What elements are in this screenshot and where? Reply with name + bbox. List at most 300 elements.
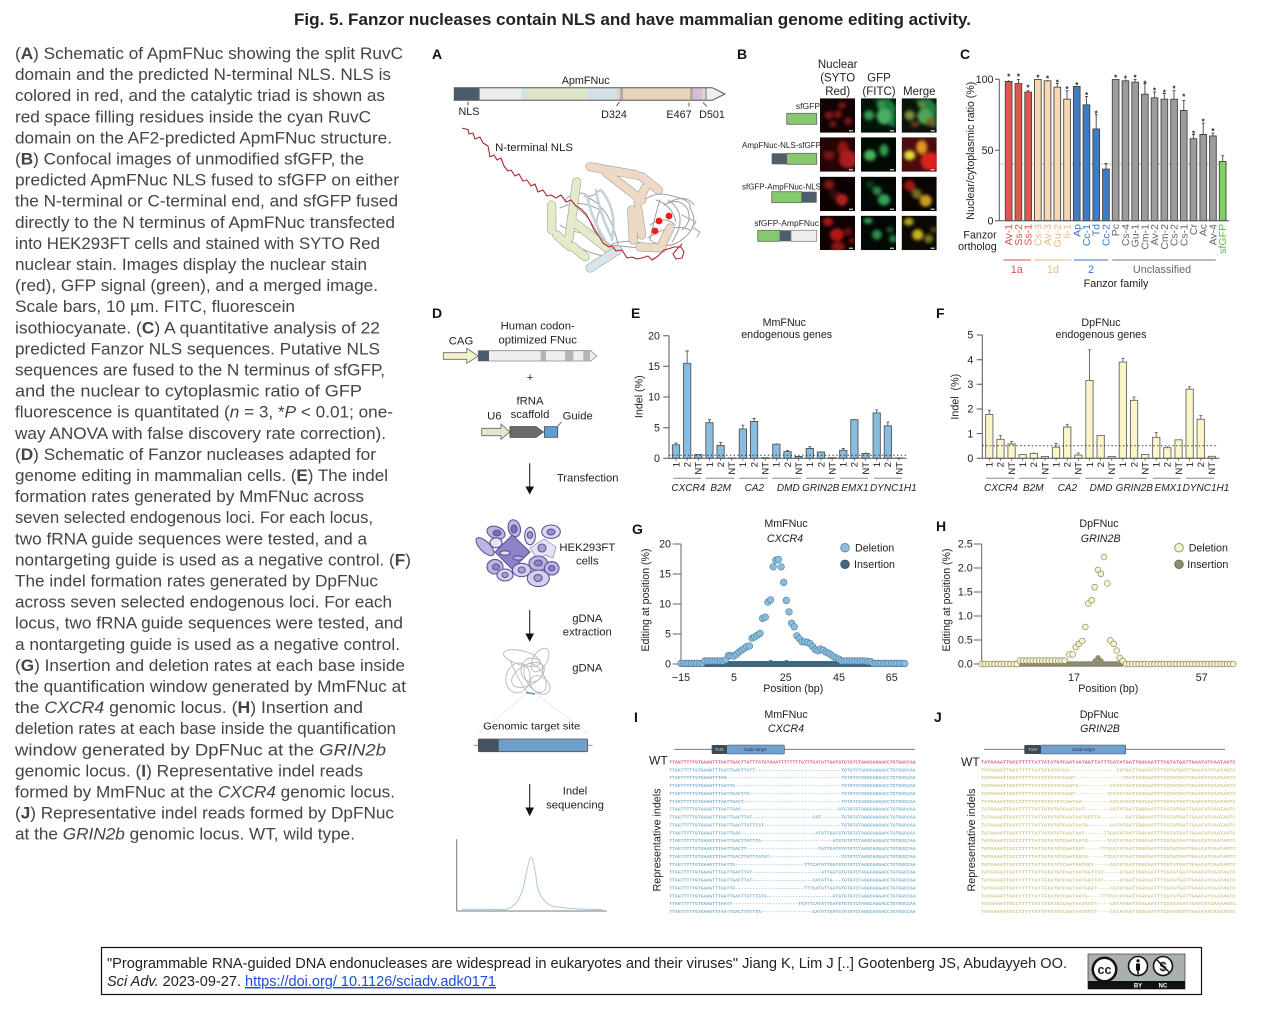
construct labels: + xyxy=(527,372,534,384)
domain bar labels: D501 xyxy=(699,109,725,121)
sequence alignment: TTAGTTTTTGTGAAGTTTAATTGACTTATTTA-------------------------ATGTGTGTCTAGGCAGGACCTGTGGCCAA xyxy=(669,838,916,844)
sequence alignment: TATGAAATTGCCTTTTTATTATATGTCAATAATG----TTTCATATGATTGGCAATTTCGTATGATTGAATATCAATAGTC xyxy=(981,893,1236,899)
axis row heading xyxy=(958,230,997,253)
label: HEK293FT cells: HEK293FT xyxy=(559,542,615,554)
sequence alignment: TATGAAATTGCCTTTTTATTATATGTCAATAATGGTT----CATATGATTGGCAATTTCGTATGATTGAATATCAATAGTC xyxy=(981,901,1236,907)
gene group lines xyxy=(986,477,1214,479)
text block: figure caption: locus, two fRNA guide sequences were tested, and xyxy=(15,614,403,633)
y tick labels xyxy=(967,330,973,465)
zoom lines xyxy=(478,693,588,733)
ortholog labels: Ss-2 xyxy=(1013,224,1025,246)
text block: figure caption: the CXCR4 genomic locus. ( H) Insertion and xyxy=(15,698,363,717)
threshold dotted line xyxy=(669,454,907,456)
axes xyxy=(977,335,1219,458)
text block: figure caption: domain and the predicted N-terminal NLS. NLS is xyxy=(15,65,391,84)
x tick labels: Position (bp) xyxy=(763,683,823,695)
arrow: transfection xyxy=(526,463,533,494)
sequence alignment: TTAGTTTTTGTGAAGTTTAATTGACTT-------------------------TATTGATGTGTGTCTAGGCAGGACCTGTGGCCAA xyxy=(669,846,916,852)
sequence alignment: TATGAAATTGCCTTTTTATTATATGTCAATAAT------TTCATATGATTGGCAATTTCGTATGATTGAATATCAATAGTC xyxy=(981,830,1236,836)
text block: figure caption: genome editing in mammalian cells. (E) The indel xyxy=(15,466,388,485)
insertion series xyxy=(681,663,905,664)
y tick labels: 1.0 xyxy=(958,611,973,623)
text block: figure caption: nuclear stain. Images display the nuclear stain xyxy=(15,255,367,274)
x tick labels: 5 xyxy=(731,672,737,684)
construct labels: CAG xyxy=(449,336,473,348)
chart title F: endogenous genes xyxy=(1056,329,1146,341)
citation reference: Sci Adv. 2023-09-27. xyxy=(107,974,241,990)
citation link: https://doi.org/ 10.1126/sciadv.adk0171 xyxy=(245,974,496,990)
chart title H: DpFNuc xyxy=(1079,518,1119,530)
locus diagram: Guide target xyxy=(743,747,767,752)
sequence alignment: TATGAAATTGCCTTTTTATTATATGTCAATAATGGTTATTTCATATGATTGGCAATTTCGTATGATTGAATATCAATAGTC xyxy=(981,759,1236,765)
gene labels: DYNC1H1 xyxy=(870,483,917,494)
y tick labels: 50 xyxy=(982,145,994,157)
text block: figure caption: way ANOVA with false discovery rate correction). xyxy=(14,424,386,443)
icon: CC BY NC badge xyxy=(1088,954,1185,990)
text block: figure caption: (G) Insertion and deletion rates at each base inside xyxy=(15,656,405,675)
ortholog labels: Cs-2 xyxy=(1168,224,1180,246)
protein structure illustration xyxy=(463,128,700,268)
WT label: WT xyxy=(961,755,980,769)
sequence alignment: TTAGTTTTTGTGAAGTTTAATTGACTTAT---------------------CAT-------TGTGTCTAGGCAGGACCTGTGGCCAA xyxy=(669,815,916,821)
chart title J: DpFNuc xyxy=(1080,709,1120,721)
gene labels: CA2 xyxy=(745,483,764,494)
ortholog labels: Av-2 xyxy=(1149,224,1161,245)
y tick labels xyxy=(659,539,671,671)
family brackets and labels: Unclassified xyxy=(1133,264,1191,276)
y tick labels: 4 xyxy=(967,354,973,366)
sequence alignment: TATGAAATTGCCTTTTTATTATATGTCAATAATGGTTAT-----ATGATTGGCAATTTCGTATGATTGAATATCAATAGTC xyxy=(981,870,1236,876)
panel: J xyxy=(934,709,1236,915)
significance stars: * xyxy=(1017,73,1021,82)
ortholog labels: Cs-4 xyxy=(1120,224,1132,246)
significance stars: * xyxy=(1056,78,1060,87)
bars xyxy=(1005,79,1226,221)
domain bar labels: ApmFNuc xyxy=(562,75,610,87)
text block: figure caption xyxy=(14,44,411,844)
column headers: (FITC) xyxy=(862,86,896,98)
column headers: Red) xyxy=(825,86,850,98)
x tick labels: NT xyxy=(794,462,805,475)
sequence alignment xyxy=(669,759,916,915)
ortholog labels: Cm-2 xyxy=(1159,224,1171,250)
legend G: Deletion xyxy=(855,542,894,554)
y axis title: Nuclear/cytoplasmic ratio (%) xyxy=(965,82,977,220)
construct labels and bars xyxy=(742,101,821,241)
family brackets and labels: 1a xyxy=(1011,264,1023,276)
significance stars: * xyxy=(1095,109,1099,118)
gene labels: B2M xyxy=(1023,483,1044,494)
icon: CC BY NC badge: $ xyxy=(1159,959,1167,974)
y tick labels xyxy=(958,539,973,671)
panel letter C: C xyxy=(960,46,970,62)
significance stars: * xyxy=(1211,127,1215,136)
significance stars: * xyxy=(1027,84,1031,93)
text block: figure caption: (A) Schematic of ApmFNuc showing the split RuvC xyxy=(15,44,403,63)
x tick labels: 2 xyxy=(883,462,894,467)
x tick labels: NT xyxy=(861,462,872,475)
construct labels: optimized FNuc xyxy=(498,334,577,346)
y tick labels: 5 xyxy=(654,422,660,434)
text block: figure caption: genomic locus. (I) Representative indel reads xyxy=(15,761,363,780)
legend H: Deletion xyxy=(1189,542,1228,554)
family brackets and labels: Fanzor family xyxy=(1084,278,1149,290)
x tick labels: 1 xyxy=(805,462,816,467)
significance stars: * xyxy=(1065,85,1069,94)
y tick labels: 15 xyxy=(659,569,671,581)
y tick labels: 0 xyxy=(988,215,994,227)
x tick labels: NT xyxy=(827,462,838,475)
bars xyxy=(986,350,1216,458)
sequence alignment: TTAGTTTTTGTGAAGTTTAATTG------------------------TTTCATATTGATGTGTGTCTAGGCAGGACCTGTGGCCAA xyxy=(669,886,916,892)
text block: figure caption: predicted ApmFNuc NLS fused to sfGFP on either xyxy=(15,171,399,190)
y tick labels: 0 xyxy=(967,453,973,465)
chart title F xyxy=(1056,317,1146,341)
column headers: Merge xyxy=(903,86,936,98)
x tick labels: 2 xyxy=(1096,462,1107,467)
legend H xyxy=(1175,542,1228,571)
legend H: Insertion xyxy=(1187,559,1228,571)
panel: E xyxy=(631,305,917,494)
y tick labels xyxy=(976,74,994,227)
locus diagram: TAM xyxy=(715,747,724,752)
ortholog labels: Td xyxy=(1091,224,1103,236)
text block: figure caption: Scale bars, 10 µm. FITC, fluorescein xyxy=(15,297,295,316)
x axis ticks xyxy=(676,458,903,461)
text block: figure caption: domain on the AF2-predicted ApmFNuc structure. xyxy=(15,128,392,147)
x tick labels: 2 xyxy=(1129,462,1140,467)
y tick labels: 0 xyxy=(654,453,660,465)
sequence alignment: TATGAAATTGCCTTTTTATTATATGTCAATAA---------CATATGATTGGCAATTTCGTATGATTGAATATCAATAGTC xyxy=(981,799,1236,805)
x tick labels: NT xyxy=(1107,462,1118,475)
ortholog labels: Cs-3 xyxy=(1032,224,1044,246)
axes xyxy=(995,79,1229,221)
chart title E: MmFNuc xyxy=(763,317,807,329)
sequence alignment: TTAGTTTTTGTGAAGTTTAATTGAC--------------------------ATATTGATGTGTGTCTAGGCAGGACCTGTGGCCAA xyxy=(669,830,916,836)
sequence alignment: TATGAAATTGCCTTTTTATTATATGTCAATAATGGTTA--------GATTGGCAATTTCGTATGATTGAATATCAATAGTC xyxy=(981,815,1236,821)
x tick labels: 1 xyxy=(738,462,749,467)
text block: figure caption: directly to the N terminus of ApmFNuc transfected xyxy=(15,213,395,232)
column headers: (SYTO xyxy=(820,72,855,84)
gene labels: DYNC1H1 xyxy=(1183,483,1229,494)
panel letter G: G xyxy=(632,521,643,537)
x tick labels: NT xyxy=(694,462,705,475)
panel letter E: E xyxy=(631,305,640,321)
text block: figure caption: two fRNA guide sequences were tested, and a xyxy=(15,529,368,548)
significance stars: * xyxy=(1085,91,1089,100)
chart title F: DpFNuc xyxy=(1081,317,1121,329)
x tick labels: 1 xyxy=(671,462,682,467)
x tick labels xyxy=(985,462,1218,475)
x tick labels: 1 xyxy=(1118,462,1129,467)
text block: figure caption: (J) Representative indel reads formed by DpFNuc xyxy=(15,804,395,823)
sequence alignment: TTAGTTTTTGTGAAGTTTAATTGACTTATTTAT---------------------------TGTGTCTAGGCAGGACCTGTGGCCAA xyxy=(669,822,916,828)
sequence alignment: TATGAAATTGCCTTTTTATTATATGTCAATA----------CATATGATTGGCAATTTCGTATGATTGAATATCAATAGTC xyxy=(981,783,1236,789)
panel: H xyxy=(936,518,1236,695)
significance stars: * xyxy=(1134,74,1138,83)
y tick labels: 5 xyxy=(967,330,973,342)
text block: figure caption: deletion rates at each base inside the quantification xyxy=(15,719,396,738)
y tick labels: 15 xyxy=(648,361,660,373)
gene labels: EMX1 xyxy=(1155,483,1182,494)
scaffold and guide xyxy=(510,422,562,437)
x tick labels: 1 xyxy=(1018,462,1029,467)
domain bar labels: N-terminal NLS xyxy=(495,142,573,154)
panel: B xyxy=(737,46,941,252)
construct labels: Human codon- xyxy=(501,320,575,332)
panel: I xyxy=(634,709,916,915)
ortholog labels: Gu-2 xyxy=(1052,224,1064,247)
icon: CAG promoter arrow xyxy=(443,348,478,363)
deletion series xyxy=(979,554,1236,667)
gene labels: GRIN2B xyxy=(802,483,840,494)
panel: C xyxy=(958,46,1229,290)
construct labels and bars: sfGFP-AmpFNuc xyxy=(754,218,820,228)
significance stars: * xyxy=(1153,87,1157,96)
chart title H xyxy=(1079,518,1121,545)
text block: figure caption: window generated by DpFNuc at the GRIN2b xyxy=(14,740,386,759)
label: gDNA extraction: extraction xyxy=(563,626,612,638)
sequence alignment: TTAGTTTTTGTGAAGTTTAATTG------------------------TTTCATATTGATGTGTGTCTAGGCAGGACCTGTGGCCAA xyxy=(669,862,916,868)
ortholog labels: Cc-2 xyxy=(1100,224,1112,246)
y axis title: Indel (%) xyxy=(950,374,962,420)
construct labels and bars: AmpFNuc-NLS-sfGFP xyxy=(742,140,821,150)
y axis title: Representative indels xyxy=(652,788,664,892)
significance stars: * xyxy=(1114,74,1118,83)
label: genomic target site: Genomic target site xyxy=(483,722,581,732)
x tick labels xyxy=(672,672,898,695)
y tick labels: 10 xyxy=(648,392,660,404)
arrow: gDNA extraction xyxy=(526,610,533,641)
x tick labels: 1 xyxy=(1152,462,1163,467)
chart title I: MmFNuc xyxy=(764,709,808,721)
sequence alignment: TATGAAATTGCCTTTTTATTATATGTCAAT---------------TGATTGGCAATTTCGTATGATTGAATATCAATAGTC xyxy=(981,775,1236,781)
text block: figure caption: sequences are fused to the N terminus of sfGFP, xyxy=(15,360,385,380)
text block: figure caption: (B) Confocal images of unmodified sfGFP, the xyxy=(15,150,364,168)
x tick labels: 2 xyxy=(1196,462,1207,467)
ortholog labels: Av-1 xyxy=(1003,224,1015,245)
sequence alignment: TATGAAATTGCCTTTTTATTATATGTCAATAATGGT-----CATATGATTGGCAATTTCGTATGATTGAATATCAATAGTC xyxy=(981,862,1236,868)
sequence alignment: TTAGTTTTTGTGAAGTTTAATTGACTTATT------------------------------TGTGTCTAGGCAGGACCTGTGGCCAA xyxy=(669,767,916,773)
x tick labels: 2 xyxy=(1062,462,1074,467)
significance stars: * xyxy=(1182,93,1186,102)
y tick labels: 2.5 xyxy=(958,539,973,551)
significance stars: * xyxy=(1192,129,1196,138)
x tick labels: 2 xyxy=(996,462,1007,467)
panel letter I: I xyxy=(634,709,638,725)
locus diagram xyxy=(674,745,915,754)
ortholog labels: Cc-1 xyxy=(1081,224,1093,246)
y axis title: Representative indels xyxy=(966,788,978,892)
text block: figure caption: nontargeting guide is used as a negative control. (F) xyxy=(15,550,411,569)
sequence alignment: TTAGTTTTTGTGAAGTTTAATTGACTTATTTATAT-------------------------TGTGTCTAGGCAGGACCTGTGGCCAA xyxy=(669,854,916,860)
y axis title: Editing at position (%) xyxy=(640,548,652,652)
x tick labels: NT xyxy=(1040,462,1051,475)
sequence alignment: TTAGTTTTTGTGAAGTTTAATTG-------------------------------------TGTGTCTAGGCAGGACCTGTGGCCAA xyxy=(669,783,916,789)
text block: figure caption: formation rates generated by MmFNuc across xyxy=(15,487,364,506)
y tick labels: 0.5 xyxy=(958,635,973,647)
x tick labels: 45 xyxy=(833,672,845,684)
sequence alignment: TTAGTTTTTGTGAAGTTTAATTGACTTAT------------------------ATTGATGTGTGTCTAGGCAGGACCTGTGGCCAA xyxy=(669,870,916,876)
chart title I xyxy=(764,709,808,735)
domain bar labels: D324 xyxy=(601,109,627,121)
gene labels: CXCR4 xyxy=(984,483,1018,494)
y tick labels: 2 xyxy=(967,404,973,416)
x tick labels: NT xyxy=(1207,462,1218,475)
label: indel sequencing: sequencing xyxy=(546,800,604,812)
sequence alignment: TTAGTTTTTGTGAAGTTTAA----------------------------------------TGTGTCTAGGCAGGACCTGTGGCCAA xyxy=(669,775,916,781)
sequence alignment: TTAGTTTTTGTGAAGTTTAATTGACT----------------------------------TGTGTCTAGGCAGGACCTGTGGCCAA xyxy=(669,799,916,805)
y tick labels: 2.0 xyxy=(958,563,973,575)
sequence alignment: TATGAAATTGCCTTTTTATTATATGTCAATAAT-----TTTCATATGATTGGCAATTTCGTATGATTGAATATCAATAGTC xyxy=(981,846,1236,852)
x tick labels: 1 xyxy=(985,462,996,467)
x axis ticks xyxy=(989,458,1216,461)
y tick labels: 0 xyxy=(665,659,671,671)
significance stars: * xyxy=(1172,84,1176,93)
sequence alignment: TATGAAATTGCCTTTTTATTATATGTCAATAATGGTT----CATATGATTGGCAATTTCGTATGATTGAATATCAATAGTC xyxy=(981,909,1236,915)
ortholog labels: Cr xyxy=(1188,224,1200,235)
gene labels: EMX1 xyxy=(841,483,869,494)
sequence alignment: TATGAAATTGCCTTTTTATTATATGTCAAT----------TCATATGATTGGCAATTTCGTATGATTGAATATCAATAGTC xyxy=(981,791,1236,797)
significance stars: * xyxy=(1163,89,1167,98)
construct labels: fRNA xyxy=(516,396,544,408)
locus diagram: TAM xyxy=(1028,747,1037,752)
x tick labels: 25 xyxy=(780,672,792,684)
x tick labels: NT xyxy=(1140,462,1151,475)
x tick labels: 1 xyxy=(1185,462,1196,467)
sequence alignment: TTAGTTTTTGTGAAGTTTAATTGACTTA--------------------------------TGTGTCTAGGCAGGACCTGTGGCCAA xyxy=(669,791,916,797)
x tick labels: 1 xyxy=(772,462,783,467)
domain bar: ApmFNuc xyxy=(454,88,725,106)
sequence alignment: TTAGTTTTTGTGAAGTTTAATTGAC----------------------------------GTGTGTCTAGGCAGGACCTGTGGCCAA xyxy=(669,807,916,813)
text block: figure caption: a nontargeting guide is used as a negative control. xyxy=(15,635,400,654)
x tick labels: NT xyxy=(760,462,772,475)
text block: figure caption: (red), GFP signal (green), and a merged image. xyxy=(15,276,378,295)
chart title E xyxy=(741,317,832,341)
panel: G xyxy=(632,518,908,695)
x tick labels: 2 xyxy=(850,462,861,467)
significance stars: * xyxy=(1124,74,1128,83)
y tick labels: 20 xyxy=(648,330,660,342)
construct labels: Guide xyxy=(563,411,593,423)
family brackets and labels: 2 xyxy=(1088,264,1094,276)
chart title I: CXCR4 xyxy=(768,723,804,735)
significance stars xyxy=(1007,73,1215,138)
bars xyxy=(672,351,903,458)
ortholog labels: Av-4 xyxy=(1207,224,1219,245)
icon: target site highlight xyxy=(526,692,535,694)
gene labels xyxy=(984,483,1229,494)
sequence alignment: TATGAAATTGCCTTTTTATTATATGTCAATAATGGTTAT-----ATGATTGGCAATTTCGTATGATTGAATATCAATAGTC xyxy=(981,878,1236,884)
citation box xyxy=(102,948,1202,994)
x tick labels: 57 xyxy=(1196,672,1208,684)
y tick labels: 5 xyxy=(665,629,671,641)
sequence alignment: TATGAAATTGCCTTTTTATTATATGTCA---------------TATGATTGGCAATTTCGTATGATTGAATATCAATAGTC xyxy=(981,767,1236,773)
ortholog labels: Cm-1 xyxy=(1139,224,1151,250)
gene labels xyxy=(671,483,917,494)
threshold dotted line xyxy=(999,163,1228,165)
chart title E: endogenous genes xyxy=(741,329,832,341)
domain bar labels: E467 xyxy=(666,109,692,121)
locus diagram xyxy=(984,745,1225,754)
panel: A xyxy=(432,46,725,268)
icon: HEK293FT cells xyxy=(473,518,560,587)
gene labels: DMD xyxy=(1090,483,1112,494)
WT label: WT xyxy=(649,754,668,768)
label: transfection: Transfection xyxy=(557,472,619,484)
sequence alignment: TTAGTTTTTGTGAAGTTTAATTGACTTATTTATATAAATTTTTTTTGTTTCATATTGATGTGTGTCTAGGCAGGACCTGTGGCCAA xyxy=(669,759,916,765)
y tick labels: 10 xyxy=(659,599,671,611)
axis row heading: Fanzor xyxy=(963,230,997,242)
sequence alignment: TATGAAATTGCCTTTTTATTATATGTCAATAAT--------CATATGATTGGCAATTTCGTATGATTGAATATCAATAGTC xyxy=(981,807,1236,813)
insertion series xyxy=(1019,658,1123,664)
ortholog labels: sfGFP xyxy=(1217,224,1229,254)
x tick labels: 2 xyxy=(816,462,827,467)
x tick labels: Position (bp) xyxy=(1078,683,1138,695)
chart title G: MmFNuc xyxy=(764,518,808,530)
significance stars: * xyxy=(1143,79,1147,88)
text block: figure caption: colored in red, and the catalytic triad is shown as xyxy=(15,86,385,105)
x tick labels: 1 xyxy=(872,462,883,467)
y tick labels: 3 xyxy=(967,379,973,391)
text block: figure caption: red space filling residues inside the cyan RuvC xyxy=(15,107,371,126)
arrow: indel sequencing xyxy=(526,784,533,815)
gene labels: B2M xyxy=(710,483,732,494)
x tick labels: 1 xyxy=(839,462,850,467)
x tick labels: NT xyxy=(1007,462,1018,475)
label: HEK293FT cells: cells xyxy=(576,556,599,568)
sequence alignment: TTAGTTTTTGTGAAGTTTAATTGACTTATTTA------------------CATATTGATGTGTGTCTAGGCAGGACCTGTGGCCAA xyxy=(669,909,916,915)
axes xyxy=(974,544,982,664)
construct labels and bars: sfGFP-AmpFNuc-NLS xyxy=(742,182,821,192)
x tick labels: NT xyxy=(894,462,905,475)
gene labels: GRIN2B xyxy=(1116,483,1153,494)
gene labels: DMD xyxy=(777,483,800,494)
text block: figure caption: into HEK293FT cells and stained with SYTO Red xyxy=(15,234,380,253)
x tick labels: 17 xyxy=(1068,672,1080,684)
panel letter D: D xyxy=(432,305,442,321)
gene labels: CXCR4 xyxy=(671,483,706,494)
icon: CC BY NC badge: NC xyxy=(1159,984,1168,990)
chart title H: GRIN2B xyxy=(1081,533,1121,545)
text block: figure caption: the quantification window generated by MmFNuc at xyxy=(15,677,406,696)
label: indel sequencing: Indel xyxy=(563,786,587,798)
y tick labels: 20 xyxy=(659,539,671,551)
ortholog labels: Gu-1 xyxy=(1130,224,1142,247)
construct labels: U6 xyxy=(487,411,502,423)
domain bar labels xyxy=(458,75,725,154)
x tick labels xyxy=(671,462,905,475)
construct labels and bars: sfGFP xyxy=(796,101,820,111)
axes xyxy=(663,336,907,458)
icon: CC BY NC badge: cc xyxy=(1098,963,1111,977)
ortholog labels xyxy=(1003,224,1229,254)
legend G xyxy=(841,542,895,571)
title: Fig. 5. Fanzor nucleases contain NLS and have mammalian genome editing activity. xyxy=(294,11,971,29)
significance stars: * xyxy=(1007,73,1011,82)
text block: figure caption: at the GRIN2b genomic locus. WT, wild type. xyxy=(15,825,355,844)
column headers: GFP xyxy=(867,72,891,84)
y tick labels: 1.5 xyxy=(958,587,973,599)
x tick labels: 2 xyxy=(1029,462,1040,467)
panel letter F: F xyxy=(936,305,945,321)
icon: U6 promoter arrow xyxy=(482,424,510,439)
x tick labels: 2 xyxy=(1163,462,1174,467)
y tick labels: 0.0 xyxy=(958,659,973,671)
sequence alignment: TATGAAATTGCCTTTTTATTATATGTCAATAATG-------CATATGATTGGCAATTTCGTATGATTGAATATCAATAGTC xyxy=(981,822,1236,828)
text block: figure caption: and the nuclear to cytoplasmic ratio of GFP xyxy=(15,382,362,401)
x tick labels: 65 xyxy=(886,672,898,684)
